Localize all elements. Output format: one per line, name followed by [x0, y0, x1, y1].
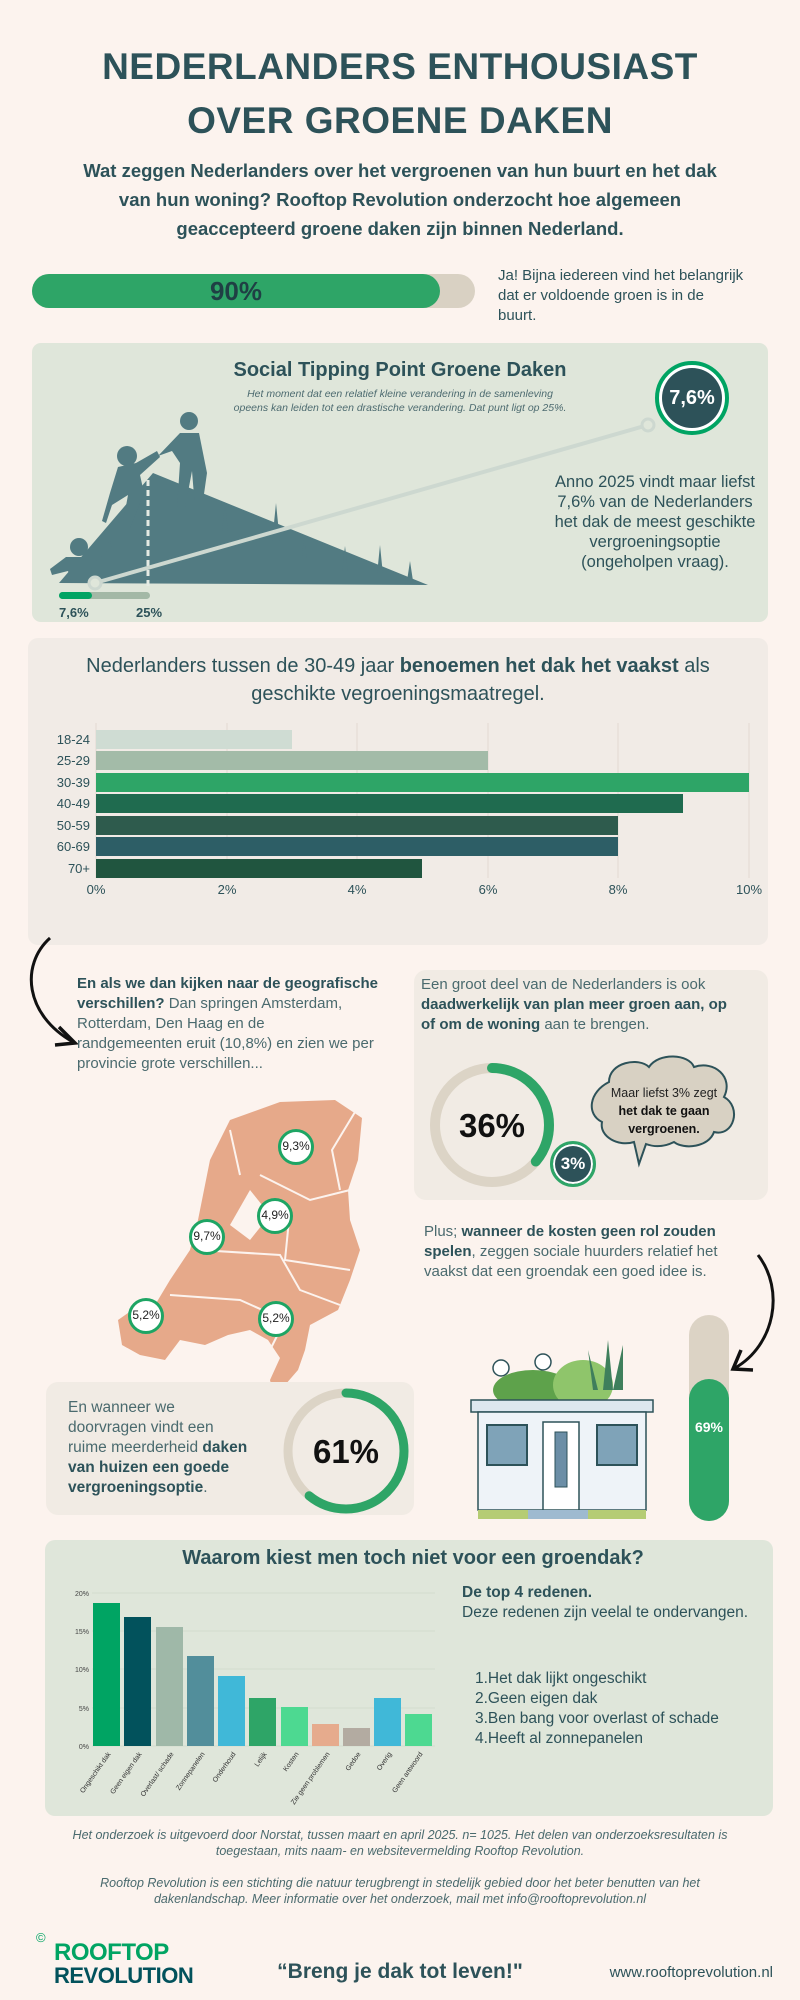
61% text	[68, 1399, 247, 1496]
bar chart: reasons: 15%	[75, 1629, 89, 1636]
text: 90% explanation: Ja! Bijna iedereen vind het belangrijk	[498, 267, 743, 284]
donut 61%	[284, 1388, 408, 1514]
logo: ROOFTOP	[54, 1939, 169, 1966]
website: www.rooftoprevolution.nl	[610, 1964, 773, 1981]
arrow: left curved	[30, 936, 78, 1047]
bar chart: reasons: Overig	[376, 1751, 394, 1772]
age heading: Nederlanders tussen de 30-49 jaar benoemen het dak het vaakst als geschikte vegroeningsmaatregel.	[86, 655, 710, 705]
bar chart: reasons: Gedoe	[345, 1751, 363, 1772]
bar chart: age groups: 60-69	[57, 839, 90, 854]
tube gauge 69%	[689, 1315, 729, 1521]
subtitle: van hun woning? Rooftop Revolution onderzocht hoe algemeen	[119, 189, 681, 210]
footer: methodology: toegestaan, mits naam- en websitevermelding Rooftop Revolution.	[216, 1844, 584, 1858]
tube gauge 69%: 69%	[695, 1419, 723, 1435]
text: 90% explanation: dat er voldoende groen is in de	[498, 287, 704, 304]
bar chart: age groups: 2%	[218, 882, 237, 897]
plans text: daadwerkelijk van plan meer groen aan, op	[421, 996, 727, 1013]
tipping explanation text: het dak de meest geschikte	[555, 513, 755, 531]
map: Netherlands: 5,2%	[262, 1311, 290, 1325]
reasons intro text	[462, 1584, 748, 1621]
footer: about: dakenlandschap. Meer informatie over het onderzoek, mail met info@rooftoprevolution.nl	[154, 1892, 646, 1906]
text: geographic: Rotterdam, Den Haag en de	[77, 1015, 265, 1032]
map labels	[278, 1129, 314, 1165]
text: 90% explanation	[498, 267, 744, 324]
plans text: of om de woning aan te brengen.	[421, 1016, 649, 1033]
progress bar 90%	[32, 274, 475, 308]
text: social renters	[424, 1223, 718, 1280]
reasons heading: Waarom kiest men toch niet voor een groendak?	[182, 1547, 644, 1569]
badge 3%: 3%	[561, 1154, 585, 1173]
bar chart: reasons: Zie geen problemen	[290, 1751, 332, 1806]
61% text: En wanneer we	[68, 1399, 175, 1416]
subtitle: geaccepteerd groene daken zijn binnen Nederland.	[176, 218, 624, 239]
footer: about: Rooftop Revolution is een stichting die natuur terugbrengt in stedelijk gebied door het beter benutten van het	[100, 1876, 700, 1890]
badge 3%	[550, 1141, 596, 1187]
subtitle: Wat zeggen Nederlanders over het vergroenen van hun buurt en het dak	[83, 160, 717, 181]
bar chart: reasons: Ongeschikt dak	[79, 1751, 113, 1795]
title	[102, 46, 698, 141]
cloud callout	[590, 1056, 736, 1168]
logo: REVOLUTION	[54, 1963, 193, 1988]
icon: green roof house	[470, 1340, 654, 1519]
text: 90% explanation: buurt.	[498, 307, 536, 324]
map: Netherlands: 4,9%	[261, 1208, 289, 1222]
title: NEDERLANDERS ENTHOUSIAST	[102, 46, 698, 87]
map: Netherlands: 9,7%	[193, 1229, 221, 1243]
cloud callout: het dak te gaan	[618, 1104, 710, 1118]
reasons intro text: De top 4 redenen.	[462, 1584, 592, 1601]
illustration: mountain climbers	[50, 412, 656, 620]
bar chart: age groups: 30-39	[57, 775, 90, 790]
bar chart: age groups: 50-59	[57, 818, 90, 833]
bar chart: age groups: 4%	[348, 882, 367, 897]
text: social renters: spelen, zeggen sociale huurders relatief het	[424, 1243, 718, 1260]
bar chart: reasons: Zonnepanelen	[175, 1751, 207, 1792]
bar chart: reasons: Onderhoud	[212, 1751, 238, 1784]
61% text: doorvragen vindt een	[68, 1419, 214, 1436]
reasons list	[475, 1670, 719, 1747]
cloud callout: vergroenen.	[628, 1122, 700, 1136]
61% text: van huizen een goede	[68, 1459, 229, 1476]
bar chart: age groups: 18-24	[57, 732, 90, 747]
bar chart: reasons: 5%	[79, 1706, 89, 1713]
bar chart: reasons: Overlast/ schade	[140, 1751, 176, 1798]
arrow: right curved	[730, 1254, 775, 1372]
bar chart: reasons: 0%	[79, 1744, 89, 1751]
bar chart: age groups: 6%	[479, 882, 498, 897]
tipping definition: Het moment dat een relatief kleine verandering in de samenleving	[247, 388, 553, 400]
reasons list: 4.Heeft al zonnepanelen	[475, 1730, 643, 1747]
bar chart: reasons: Geen antwoord	[391, 1751, 425, 1794]
bar chart: age groups: 0%	[87, 882, 106, 897]
footer: methodology: Het onderzoek is uitgevoerd door Norstat, tussen maart en april 2025. n= 1025. Het delen van onderzoeksresultaten is	[73, 1828, 727, 1842]
panel: reasons	[45, 1540, 773, 1816]
logo: ©	[36, 1930, 46, 1945]
61% text: ruime meerderheid daken	[68, 1439, 247, 1456]
footer: about	[100, 1876, 700, 1906]
map: Netherlands	[118, 1100, 362, 1382]
badge 7,6%	[655, 361, 729, 435]
map labels: 9,3%	[282, 1139, 310, 1153]
progress bar 90%: 90%	[210, 276, 262, 306]
tipping heading: Social Tipping Point Groene Daken	[233, 359, 567, 381]
tipping explanation text: (ongeholpen vraag).	[581, 553, 729, 571]
panel: 61%	[46, 1382, 414, 1515]
title: OVER GROENE DAKEN	[187, 100, 613, 141]
61% text: vergroeningsoptie.	[68, 1479, 208, 1496]
bar chart: age groups: 8%	[609, 882, 628, 897]
logo	[36, 1930, 193, 1988]
cloud callout: Maar liefst 3% zegt	[611, 1086, 718, 1100]
tipping explanation text: vergroeningsoptie	[589, 533, 721, 551]
bar chart: reasons: Kosten	[282, 1751, 301, 1773]
bar chart: age groups: 70+	[68, 861, 90, 876]
bar chart: age groups	[57, 723, 762, 897]
plans text: Een groot deel van de Nederlanders is ook	[421, 976, 705, 993]
bar chart: age groups: 25-29	[57, 753, 90, 768]
donut 36%	[430, 1063, 554, 1187]
slogan: “Breng je dak tot leven!"	[277, 1960, 523, 1983]
reasons list: 1.Het dak lijkt ongeschikt	[475, 1670, 646, 1687]
text: geographic: verschillen? Dan springen Amsterdam,	[77, 995, 342, 1012]
bar chart: reasons: 20%	[75, 1591, 89, 1598]
badge 7,6%: 7,6%	[669, 387, 715, 409]
map: Netherlands: 5,2%	[132, 1308, 160, 1322]
panel: plans 36%	[414, 970, 768, 1200]
bar chart: age groups: 10%	[736, 882, 762, 897]
reasons intro text: Deze redenen zijn veelal te ondervangen.	[462, 1604, 748, 1621]
panel: social tipping point	[32, 343, 768, 622]
text: geographic: En als we dan kijken naar de geografische	[77, 975, 378, 992]
illustration: mountain climbers: 7,6%	[59, 605, 89, 620]
reasons list: 3.Ben bang voor overlast of schade	[475, 1710, 719, 1727]
text: geographic: randgemeenten eruit (10,8%) en zien we per	[77, 1035, 374, 1052]
bar chart: reasons: Geen eigen dak	[110, 1751, 144, 1796]
tipping definition	[234, 388, 566, 414]
illustration: mountain climbers: 25%	[136, 605, 162, 620]
panel: age chart	[28, 638, 768, 945]
donut 61%: 61%	[313, 1433, 379, 1470]
bar chart: reasons: Lelijk	[254, 1751, 269, 1768]
bar chart: age groups: 40-49	[57, 796, 90, 811]
bar chart: reasons	[75, 1591, 435, 1806]
donut 36%: 36%	[459, 1107, 525, 1144]
tipping definition: opeens kan leiden tot een drastische verandering. Dat punt ligt op 25%.	[234, 402, 566, 414]
tipping explanation text: Anno 2025 vindt maar liefst	[555, 473, 755, 491]
tipping explanation text	[555, 473, 755, 571]
tipping explanation text: 7,6% van de Nederlanders	[557, 493, 753, 511]
plans text	[421, 976, 727, 1033]
text: social renters: Plus; wanneer de kosten geen rol zouden	[424, 1223, 716, 1240]
bar chart: reasons: 10%	[75, 1667, 89, 1674]
subtitle	[83, 160, 717, 239]
text: geographic: provincie grote verschillen...	[77, 1055, 263, 1072]
footer: methodology	[72, 1828, 728, 1858]
reasons list: 2.Geen eigen dak	[475, 1690, 597, 1707]
text: social renters: vaakst dat een groendak een goed idee is.	[424, 1263, 707, 1280]
text: geographic	[77, 975, 378, 1072]
